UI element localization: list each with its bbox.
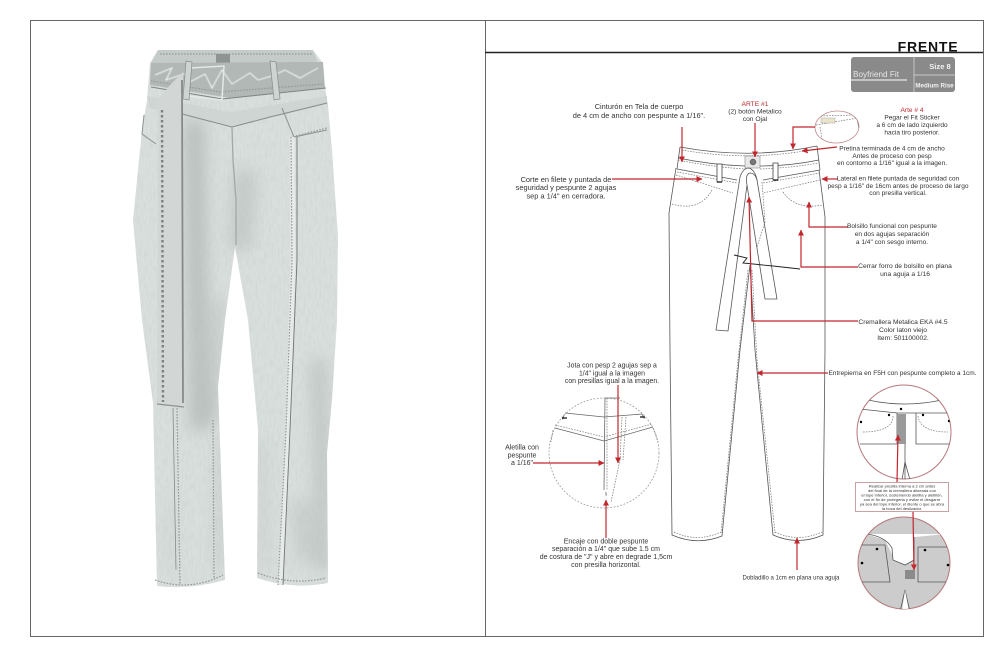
waistband button <box>216 54 230 63</box>
callout: lateral: Lateral en filete puntada de seguridad con <box>837 176 960 182</box>
callout: lateral: con presilla vertical. <box>869 190 927 197</box>
callout: arte 1: (2) botón Metalico <box>728 108 782 116</box>
fit label tag: Size 8 <box>929 62 951 71</box>
left pocket <box>142 115 156 144</box>
waistband <box>150 50 318 65</box>
callout: aletilla <box>505 444 539 467</box>
callout: pretina: Antes de proceso con pesp <box>852 153 932 160</box>
callout: corte: Corte en filete y puntada de <box>521 175 611 184</box>
belt loops <box>183 61 280 100</box>
button <box>745 156 760 168</box>
callout: encaje: separación a 1/4" que sube 1.5 cm <box>552 546 660 553</box>
callout: arte 1: con Ojal <box>743 116 768 123</box>
header rule <box>485 52 983 54</box>
callout: arte 4: Arte # 4 <box>901 107 924 114</box>
callout: jota: 1/4" igual a la imagen <box>579 370 645 378</box>
callout: arte 4 <box>876 107 948 136</box>
callout: lateral: pesp a 1/16" de 16cm antes de proceso de largo <box>828 183 969 190</box>
callout: cerrar forro <box>858 263 952 278</box>
seam details <box>232 127 236 245</box>
callout: entrepierna: Entrepierna en F5H con pespunte completo a 1cm. <box>828 370 977 377</box>
callout: corte: sep a 1/4" en cerradora. <box>526 192 606 200</box>
callout: cerrar forro: una aguja a 1/16 <box>880 271 930 278</box>
callout: pretina <box>837 146 947 167</box>
callout: lateral <box>828 176 969 197</box>
hanging belt sketch <box>716 168 777 331</box>
callout: arte 4: a 6 cm de lado izquierdo <box>876 122 948 129</box>
hanging belt <box>157 72 184 407</box>
callout: cerrar forro: Cerrar forro de bolsillo en plana <box>858 263 952 270</box>
callout: bolsillo: a 1/4" con sesgo interno. <box>856 239 928 246</box>
detail arrows <box>533 385 618 538</box>
callout: encaje: de costura de "J" y abre en degrade 1,5cm <box>540 554 672 561</box>
callout arrows <box>612 123 858 570</box>
waistband lines <box>677 146 820 180</box>
jeans body <box>125 45 345 595</box>
detail circle: inner view of fly <box>857 385 951 480</box>
callout: cremallera: Cremallera Metalica EKA #4.5 <box>858 319 948 326</box>
callout box: presilla interna <box>856 482 948 512</box>
callout box: presilla interna: del final de la cremallera alineada con <box>868 488 936 493</box>
belt handwriting <box>155 68 318 88</box>
fly and inseam stitching <box>721 182 775 533</box>
callout: cremallera: Item: 501100002. <box>877 335 929 342</box>
callout: arte 4: Pegar el Fit Sticker <box>884 114 940 122</box>
callout: bolsillo <box>847 223 937 246</box>
callout: bolsillo: Bolsillo funcional con pespunte <box>847 223 937 230</box>
callout: cremallera <box>858 319 948 342</box>
technical flat sketch of jeans <box>669 146 825 541</box>
fit label tag: Medium Rise <box>915 82 954 90</box>
callout: arte 1 <box>728 101 782 123</box>
callout: corte: seguridad y pespunte 2 agujas <box>516 183 617 192</box>
callout: dobladillo: Dobladillo a 1cm en plana una aguja <box>742 576 840 582</box>
garment outline <box>669 168 825 541</box>
callout: encaje <box>540 538 672 569</box>
detail circle: open fly view <box>858 517 950 612</box>
callout box: presilla interna: con el fin de protegerla y evitar el desgarre <box>864 497 941 502</box>
fabric belt at waist <box>150 62 325 98</box>
callout box: presilla interna: ya sea del tope inferior, el diente o que se abra <box>860 502 945 506</box>
panel divider <box>484 20 486 636</box>
callout: encaje: Encaje con doble pespunte <box>564 538 648 546</box>
callout: corte <box>516 175 617 200</box>
callout: arte 4: hacia tiro posterior. <box>884 130 940 136</box>
callout: jota: con presillas igual a la imagen. <box>565 378 659 385</box>
callout: cinturon: Cinturón en Tela de cuerpo <box>595 102 683 111</box>
callout: encaje: con presilla horizontal. <box>571 562 641 569</box>
callout: aletilla: Aletilla con <box>505 444 539 452</box>
callout: arte 1: ARTE #1 <box>741 101 769 108</box>
callout: pretina: en contorno a 1/16" igual a la imagen. <box>837 160 947 167</box>
yoke <box>147 96 327 126</box>
belt loops <box>717 163 778 182</box>
detail circle: jota <box>533 385 659 538</box>
callout: bolsillo: en dos agujas separación <box>855 231 930 238</box>
callout: cinturon <box>573 102 705 120</box>
callout: aletilla: pespunte <box>508 452 537 460</box>
fit label tag <box>851 57 955 92</box>
callout: aletilla: a 1/16" <box>511 460 533 467</box>
callout box: presilla interna: la boca del deslizador. <box>882 506 922 511</box>
callout: cremallera: Color laton viejo <box>879 327 927 334</box>
callout box arrows <box>897 435 914 570</box>
callout: jota <box>565 362 659 385</box>
callout: cinturon: de 4 cm de ancho con pespunte a 1/16". <box>573 111 705 120</box>
detail: fit sticker circle <box>814 110 860 144</box>
panel: jeans photograph <box>125 45 345 595</box>
callout: jota: Jota con pesp 2 agujas sep a <box>567 362 657 370</box>
heading: FRENTE: FRENTE <box>898 38 958 54</box>
fit label tag: Boyfriend Fit <box>853 70 900 79</box>
pockets <box>672 190 823 206</box>
callout box: presilla interna: el tope inferior, sosteniendo aletilla y aletillón, <box>861 492 943 498</box>
belt buckle <box>188 66 224 100</box>
hem stitching <box>674 532 822 538</box>
callout: pretina: Pretina terminada de 4 cm de ancho <box>839 146 945 152</box>
waist fold <box>734 255 800 269</box>
callout box: presilla interna: Realizar presilla interna a 2 cm antes <box>869 484 935 488</box>
